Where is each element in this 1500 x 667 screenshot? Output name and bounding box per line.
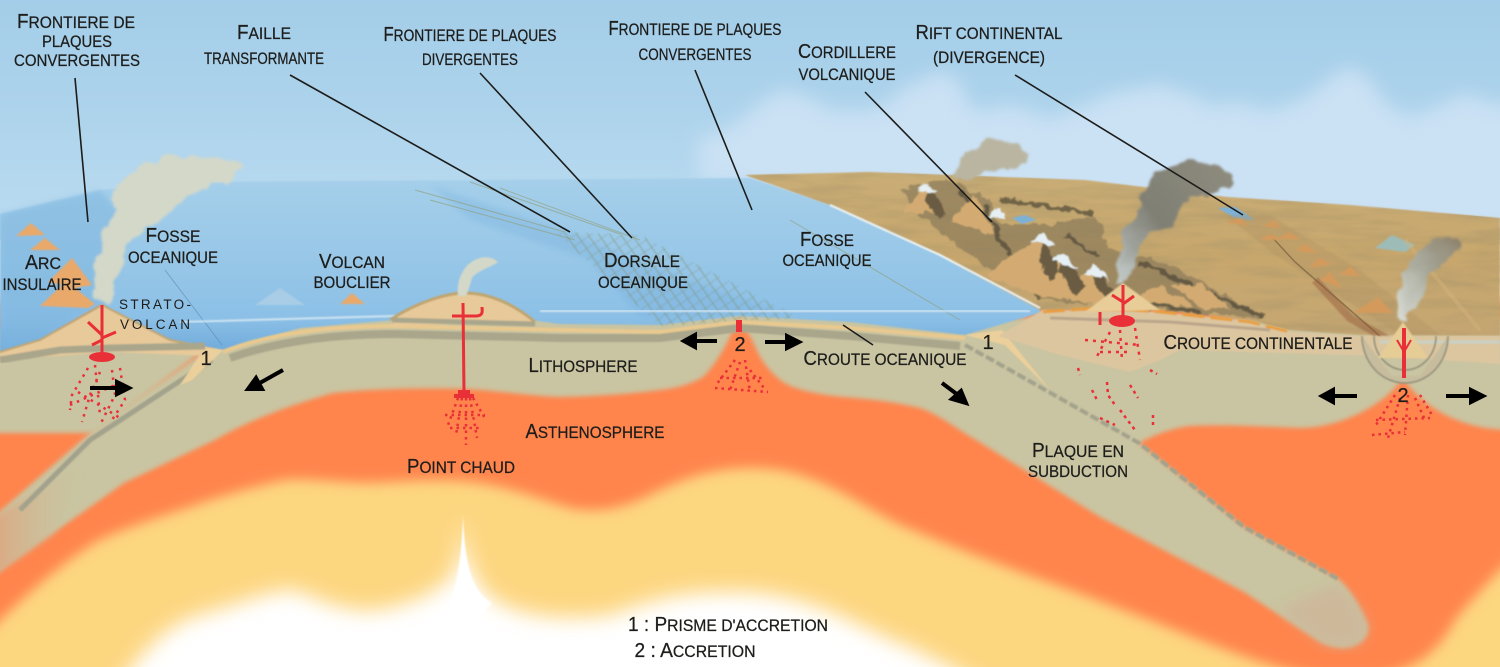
ocean ridge hatching [555,232,800,326]
label: frontiere convergentes left [14,11,140,70]
ocean ridge shading [430,185,780,318]
label: frontiere divergentes: FRONTIERE DE PLAQUES [384,24,556,46]
clouds [700,70,1500,235]
continental crust [998,308,1500,372]
accretion prism left [180,347,223,385]
label: volcan bouclier [314,251,391,292]
arrow: rift left [1322,390,1357,402]
mountain range: cordillere volcanique [900,180,1265,318]
mantle: white spike [450,515,492,625]
number markers: 2 [734,334,746,356]
arrow: subducting plate right [942,383,966,403]
label: plaque en subduction [1028,440,1128,481]
magma: ridge [715,320,768,392]
label: faille transformante: TRANSFORMANTE [204,50,324,68]
label: asthenosphere: ASTHENOSPHERE [526,421,664,443]
label: fosse oceanique left: FOSSE [146,225,200,247]
magma: stratovolcano conduit and chamber [70,305,125,425]
continent land [745,172,1500,336]
label: volcan bouclier: VOLCAN [319,251,385,273]
slab end fading, left [0,460,85,578]
dark valleys [900,180,1265,318]
continent land texture [745,172,1500,336]
magma: rift volcano [1372,328,1432,438]
arrow: ridge right [765,336,799,348]
plume: shield volcano [458,257,498,296]
number markers: 1 [982,332,994,354]
label: point chaud: POINT CHAUD [407,456,515,478]
volcano on continental crust [1085,283,1160,312]
label: fosse oceanique left [128,225,218,267]
arrow: island arc plate [90,382,129,394]
ocean floor: left ridge shading [0,190,130,352]
arrow: subducting plate left [248,370,283,389]
label: frontiere divergentes [384,24,556,69]
trench line [165,270,222,345]
plume: continental volcano [1116,163,1232,285]
label: strato-volcan: STRATO- [119,297,191,312]
label: rift continental: (DIVERGENCE) [933,49,1045,67]
ocean surface [0,178,1040,352]
arrow: ridge left [684,335,717,347]
label: frontiere convergentes left: PLAQUES [42,33,112,51]
submarine volcano [255,288,305,305]
label: arc insulaire: ARC [25,252,61,274]
magma: continental volcano [1078,285,1157,430]
plume: rift volcano [1396,239,1462,320]
label: faille transformante: FAILLE [237,22,291,44]
lakes [1012,207,1255,224]
number markers: 2 [1397,385,1409,407]
shield volcano [390,293,535,326]
label: arc insulaire: INSULAIRE [2,276,82,294]
snow caps [918,183,1110,280]
label: frontiere convergentes left: FRONTIERE DE [17,11,135,33]
right slab top crust [965,345,1340,580]
label: strato-volcan [119,297,191,332]
island arc islands [16,223,365,308]
number markers [200,332,1409,407]
label: rift continental [916,22,1062,67]
label: frontiere convergentes centre [608,18,782,64]
label: strato-volcan: VOLCAN [120,317,190,332]
oceanic crust band [20,322,1340,580]
label: frontiere convergentes centre: CONVERGENTES [638,46,752,64]
magma droplets [70,365,125,425]
coast foam line [830,205,1040,308]
label: cordillere volcanique: VOLCANIQUE [798,66,896,84]
lithosphere left of subduction [0,330,230,433]
accretion prism right [965,330,1050,390]
island arc crust and stratovolcano [0,305,210,360]
label: fosse oceanique right: OCEANIQUE [782,252,872,270]
label: croute continentale: CROUTE CONTINENTALE [1164,332,1352,354]
label: frontiere divergentes: DIVERGENTES [422,51,518,69]
magma: hot spot [445,303,486,445]
label: fosse oceanique right: FOSSE [800,229,854,251]
plate motion arrows [90,335,1483,403]
number markers: 1 [200,348,212,370]
label: dorsale oceanique [598,250,688,292]
ocean horizontal haze line [180,311,1030,322]
label: plaque en subduction: PLAQUE EN [1032,440,1124,462]
label: plaque en subduction: SUBDUCTION [1028,463,1128,481]
plume: island arc stratovolcano [94,156,246,300]
label: frontiere convergentes centre: FRONTIERE DE PLAQUES [608,18,782,40]
left slab top crust [20,360,212,510]
label: dorsale oceanique: OCEANIQUE [598,274,688,292]
label: lithosphere: LITHOSPHERE [528,355,638,377]
label: frontiere convergentes left: CONVERGENTES [14,52,140,70]
label: cordillere volcanique [798,41,896,84]
mantle: orange asthenosphere [0,300,1500,667]
label: volcan bouclier: BOUCLIER [314,274,391,292]
label: cordillere volcanique: CORDILLERE [798,41,896,63]
label: arc insulaire [2,252,82,294]
label: fosse oceanique right [782,229,872,270]
label: fosse oceanique left: OCEANIQUE [128,249,218,267]
ocean ridge and fracture lines [415,182,960,320]
mountains lit faces [905,183,1230,310]
mantle: yellow layer [0,420,1500,667]
label: dorsale oceanique: DORSALE [604,250,680,272]
label: legend accretion: 2 : ACCRETION [634,640,756,662]
sky [0,0,1500,240]
lithosphere and slabs [0,310,1500,648]
label: legend prisme d'accretion: 1 : PRISME D'ACCRETION [628,614,828,636]
leader lines [75,70,1243,345]
rift valley [1225,215,1480,345]
label: croute oceanique: CROUTE OCEANIQUE [804,348,966,370]
rift graben [1362,322,1448,383]
slab end fading, right [1280,585,1368,648]
label: rift continental: RIFT CONTINENTAL [916,22,1062,44]
plume: distant volcano [955,140,1030,178]
label: faille transformante [204,22,324,68]
arrow: rift right [1446,390,1483,402]
